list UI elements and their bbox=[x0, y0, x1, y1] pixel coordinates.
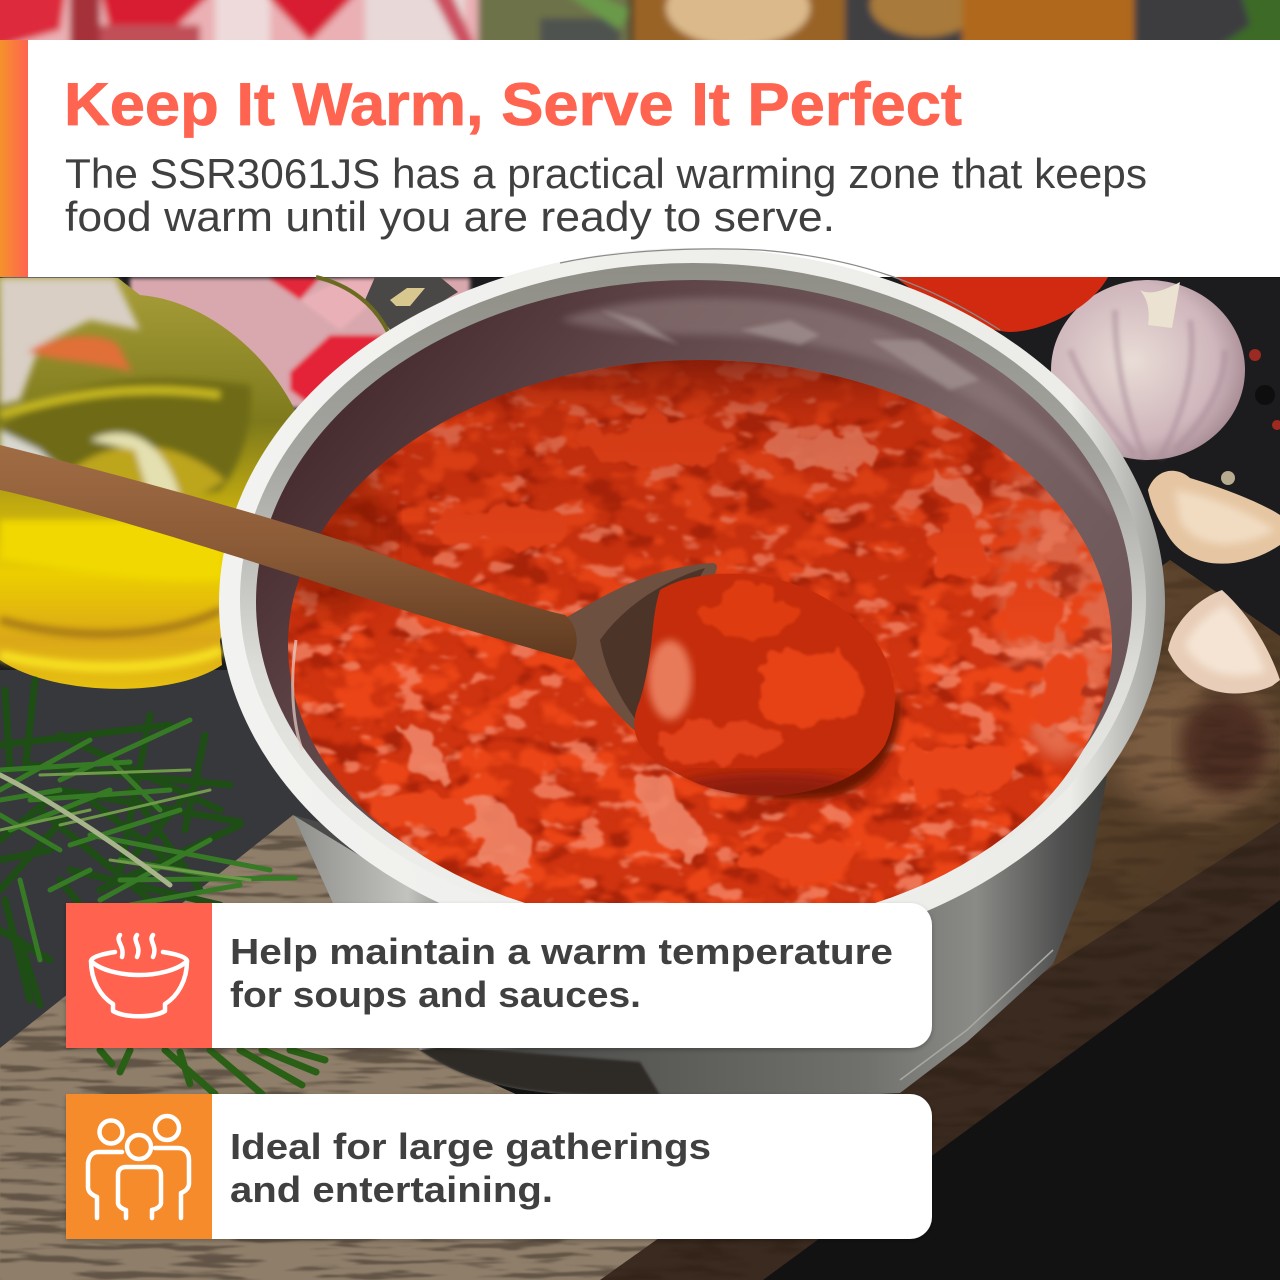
card: warm soups and sauces bbox=[66, 903, 932, 1048]
clove two bbox=[1168, 590, 1280, 694]
pot body bbox=[293, 776, 1107, 1095]
left wooden board bbox=[0, 815, 658, 1280]
card text: for soups and sauces. bbox=[230, 974, 641, 1015]
description: food warm until you are ready to serve. bbox=[65, 193, 835, 240]
card text bbox=[230, 1126, 711, 1210]
pale glossy edge on right bbox=[992, 468, 1112, 767]
icon: family group bbox=[88, 1116, 189, 1218]
card: large gatherings bbox=[66, 1094, 932, 1239]
top ingredients strip bbox=[0, 0, 1280, 40]
rosemary sprigs bbox=[0, 680, 325, 1094]
card text: and entertaining. bbox=[230, 1169, 553, 1210]
garlic bulb and cloves bbox=[1051, 280, 1280, 694]
steel pot bbox=[0, 248, 1165, 1095]
red pepper bbox=[895, 277, 1108, 332]
clove one bbox=[1148, 471, 1280, 564]
icon: soup bowl bbox=[91, 935, 187, 1016]
silver rim band bbox=[240, 263, 1146, 935]
slate table on the left bbox=[0, 670, 320, 1070]
sauce mound on spoon bbox=[634, 574, 895, 808]
pot handle bbox=[316, 277, 458, 332]
bright mottling bbox=[290, 361, 1112, 903]
accent gradient bar bbox=[0, 40, 28, 277]
glossy highlights bbox=[288, 360, 1112, 903]
pot interior wall bbox=[256, 280, 1132, 924]
tomato sauce bbox=[288, 360, 1112, 903]
description: The SSR3061JS has a practical warming zone that keeps bbox=[65, 150, 1147, 197]
outer rim bbox=[219, 248, 1165, 958]
header panel bbox=[0, 40, 1280, 277]
description bbox=[65, 150, 1147, 240]
title: Keep It Warm, Serve It Perfect bbox=[64, 71, 962, 138]
glare on left sauce edge bbox=[293, 640, 302, 750]
dark top shadow of the sauce bbox=[357, 360, 1094, 574]
spoon handle bbox=[0, 445, 577, 660]
wooden spoon bbox=[0, 445, 901, 808]
panel background bbox=[28, 40, 1280, 277]
card text: Ideal for large gatherings bbox=[230, 1126, 711, 1167]
spoon shadow bbox=[640, 690, 901, 799]
dark mottling bbox=[288, 364, 1112, 903]
card text: Help maintain a warm temperature bbox=[230, 931, 893, 972]
olive oil jug bbox=[0, 278, 296, 689]
spoon bowl bbox=[558, 563, 717, 735]
card text bbox=[230, 931, 893, 1015]
right wooden board bbox=[600, 560, 1280, 1280]
red checked cloth bbox=[130, 278, 470, 408]
